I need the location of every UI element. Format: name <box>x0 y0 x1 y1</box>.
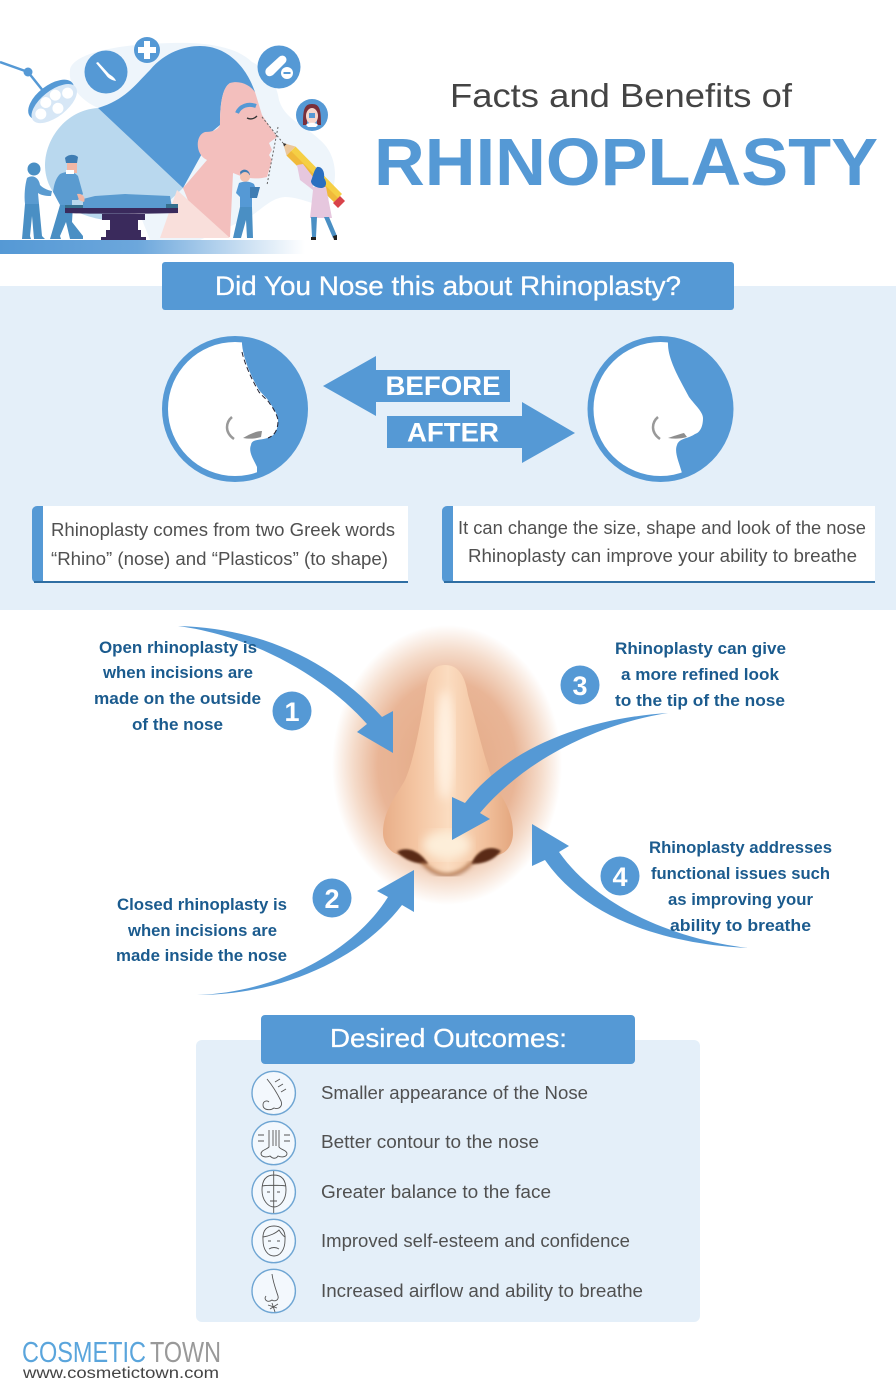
arrow: before: BEFORE <box>386 371 500 401</box>
callout 3: 3 <box>572 671 588 701</box>
outcome 2: Better contour to the nose <box>321 1132 539 1152</box>
title line 2: RHINOPLASTY <box>374 125 878 200</box>
outcome 1 <box>252 1071 588 1115</box>
logo: COSMETIC <box>22 1337 146 1369</box>
logo: www.cosmetictown.com <box>22 1365 219 1382</box>
callout 2: 2 <box>324 884 340 914</box>
pale backdrop blob <box>70 43 335 240</box>
callout 1 <box>94 626 393 753</box>
logo <box>22 1337 221 1382</box>
callout 4: ability to breathe <box>670 916 811 935</box>
logo: TOWN <box>150 1337 221 1369</box>
hair <box>98 46 255 188</box>
callout 2: made inside the nose <box>116 946 287 965</box>
nose glow <box>332 625 562 905</box>
outcome 5 <box>252 1269 643 1313</box>
callout 2: when incisions are <box>127 921 277 940</box>
surgical lamp <box>0 62 84 130</box>
callout 4 <box>532 824 832 948</box>
callout 4: functional issues such <box>651 864 830 883</box>
callout 4: as improving your <box>668 890 813 909</box>
doctor with clipboard <box>233 170 260 238</box>
outcomes background <box>196 1040 700 1322</box>
callout 3: to the tip of the nose <box>615 691 785 710</box>
heading bar <box>162 262 734 310</box>
patient on table <box>65 194 178 240</box>
callout 3: a more refined look <box>621 665 780 684</box>
callout 2 <box>116 870 414 995</box>
outcome 3: Greater balance to the face <box>321 1182 551 1202</box>
icon: pill <box>258 46 300 88</box>
icon: before nose profile <box>162 336 308 482</box>
ground band <box>0 240 305 254</box>
fact box left: “Rhino” (nose) and “Plasticos” (to shape) <box>51 549 388 569</box>
title <box>374 77 878 200</box>
arrow: after: AFTER <box>407 418 499 448</box>
callout 1: 1 <box>284 697 300 727</box>
panel background <box>0 286 896 610</box>
nurse figure <box>22 162 52 239</box>
outcome 1: Smaller appearance of the Nose <box>321 1083 588 1103</box>
woman holding pencil <box>297 164 337 240</box>
nose highlight <box>436 690 454 800</box>
outcome 4: Improved self-esteem and confidence <box>321 1231 630 1251</box>
outcomes heading: Desired Outcomes: <box>330 1023 567 1053</box>
callout 4: Rhinoplasty addresses <box>649 838 832 857</box>
arrow: after <box>387 402 575 463</box>
fact box left <box>32 506 408 583</box>
nose tip shadow <box>422 862 472 875</box>
outcome 5: Increased airflow and ability to breathe <box>321 1281 643 1301</box>
outcome 3 <box>252 1170 551 1214</box>
nose shape <box>383 665 513 875</box>
callout 4: 4 <box>612 862 628 892</box>
outcomes heading <box>261 1015 635 1064</box>
callout 1: Open rhinoplasty is <box>99 638 257 657</box>
icon: after nose profile <box>588 336 734 482</box>
icon: face portrait <box>296 99 328 131</box>
shoulder <box>160 190 230 238</box>
panel: desired outcomes <box>196 1015 700 1322</box>
pencil <box>283 143 345 208</box>
light blue circle <box>45 108 183 220</box>
callout 1: made on the outside <box>94 689 261 708</box>
icon: scalpel <box>84 50 128 94</box>
fact box right: Rhinoplasty can improve your ability to breathe <box>468 546 857 566</box>
icon: plus <box>134 37 160 63</box>
nose illustration <box>332 625 562 905</box>
callout 2: Closed rhinoplasty is <box>117 895 287 914</box>
fact box right <box>442 506 875 583</box>
nose tip highlight <box>423 831 471 859</box>
callout 1: of the nose <box>132 715 223 734</box>
callout 3 <box>452 639 786 840</box>
eyebrow and eye <box>237 105 257 119</box>
callout 3: Rhinoplasty can give <box>615 639 786 658</box>
callout 1: when incisions are <box>102 663 253 682</box>
hero illustration <box>0 37 345 240</box>
arrow: before <box>323 356 510 416</box>
heading bar: Did You Nose this about Rhinoplasty? <box>215 271 681 301</box>
panel: did you nose <box>0 262 896 610</box>
fact box left: Rhinoplasty comes from two Greek words <box>51 520 395 540</box>
outcome 4 <box>252 1219 630 1263</box>
face and neck <box>183 82 277 237</box>
dashed guide lines <box>262 117 283 185</box>
outcome 2 <box>252 1121 539 1165</box>
nostrils <box>397 848 501 864</box>
surgeon figure <box>50 155 83 239</box>
fact box right: It can change the size, shape and look of the nose <box>458 518 866 538</box>
title line 1: Facts and Benefits of <box>450 77 793 114</box>
